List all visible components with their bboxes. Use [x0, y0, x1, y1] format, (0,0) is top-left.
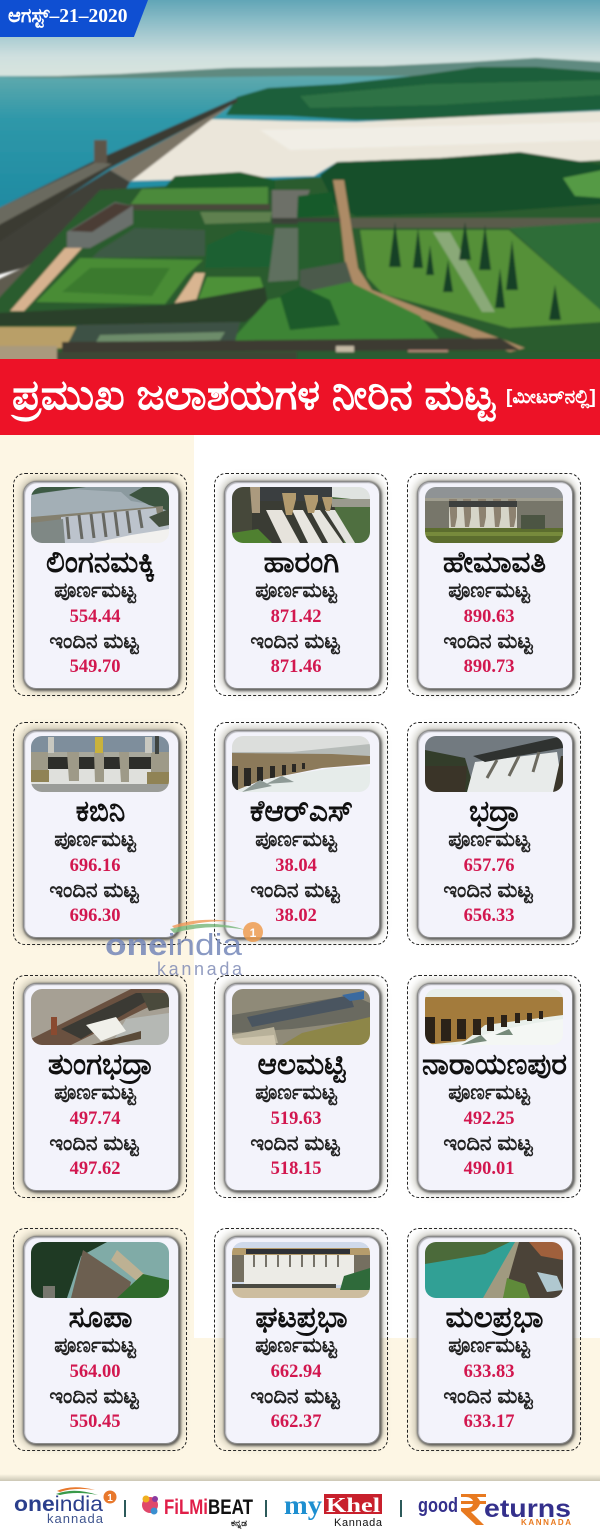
today level value: 490.01 — [464, 1159, 514, 1179]
label: today level: ಇಂದಿನ ಮಟ್ಟ — [49, 1132, 139, 1155]
logo: mykhel — [284, 1490, 383, 1529]
right garden — [360, 230, 600, 328]
mid trees — [205, 230, 278, 268]
panel: Supa — [13, 1228, 187, 1451]
label: full level: ಪೂರ್ಣಮಟ್ಟ — [255, 828, 337, 851]
foam river — [130, 111, 600, 181]
full level value: 519.63 — [271, 1109, 321, 1129]
label: full level: ಪೂರ್ಣಮಟ್ಟ — [54, 579, 136, 602]
panel: Harangi — [214, 473, 388, 696]
today level value: 549.70 — [70, 657, 120, 677]
full level value: 554.44 — [70, 607, 120, 627]
panel: Hemavathi — [407, 473, 581, 696]
watermark: oneindia kannada: 1 — [250, 926, 257, 940]
dam wall below crest — [0, 170, 130, 275]
full level value: 890.63 — [464, 607, 514, 627]
background: cream band bottom — [0, 1338, 600, 1481]
label: today level: ಇಂದಿನ ಮಟ್ಟ — [49, 879, 139, 902]
label: today level: ಇಂದಿನ ಮಟ್ಟ — [49, 630, 139, 653]
label: full level: ಪೂರ್ಣಮಟ್ಟ — [448, 828, 530, 851]
today level value: 518.15 — [271, 1159, 321, 1179]
today level value: 497.62 — [70, 1159, 120, 1179]
full level value: 662.94 — [271, 1362, 321, 1382]
today level value: 890.73 — [464, 657, 514, 677]
logo: goodreturns: KANNADA — [521, 1518, 571, 1527]
full level value: 492.25 — [464, 1109, 514, 1129]
road — [333, 180, 525, 352]
photo — [31, 487, 169, 543]
today level value: 656.33 — [464, 906, 514, 926]
label: full level: ಪೂರ್ಣಮಟ್ಟ — [54, 828, 136, 851]
label: today level: ಇಂದಿನ ಮಟ್ಟ — [250, 1385, 340, 1408]
label: full level: ಪೂರ್ಣಮಟ್ಟ — [448, 1081, 530, 1104]
logo: mykhel: Kannada — [334, 1517, 383, 1529]
photo — [232, 487, 370, 543]
background: cream panel left — [0, 435, 194, 1481]
full level value: 657.76 — [464, 856, 514, 876]
panel: Narayanapura — [407, 975, 581, 1198]
label: today level: ಇಂದಿನ ಮಟ್ಟ — [443, 1132, 533, 1155]
panel: Kabini — [13, 722, 187, 945]
label: full level: ಪೂರ್ಣಮಟ್ಟ — [255, 579, 337, 602]
today level value: 550.45 — [70, 1412, 120, 1432]
lower garden — [36, 258, 203, 304]
panel: Malaprabha — [407, 1228, 581, 1451]
green peninsula — [226, 67, 600, 120]
watermark: oneindia kannada: kannada — [157, 959, 243, 979]
label: full level: ಪೂರ್ಣಮಟ್ಟ — [448, 579, 530, 602]
label: today level: ಇಂದಿನ ಮಟ್ಟ — [250, 630, 340, 653]
panel: Ghataprabha — [214, 1228, 388, 1451]
panel: KRS — [214, 722, 388, 945]
footer: partner logos — [0, 1481, 600, 1538]
photo — [425, 487, 563, 543]
dam crest — [0, 98, 237, 243]
label: full level: ಪೂರ್ಣಮಟ್ಟ — [54, 1334, 136, 1357]
full level value: 633.83 — [464, 1362, 514, 1382]
logo: goodreturns: eturns — [484, 1495, 571, 1523]
full level value: 871.42 — [271, 607, 321, 627]
today level value: 696.30 — [70, 906, 120, 926]
logo: filmibeat — [142, 1496, 253, 1530]
logo: oneindia: oneindia — [14, 1493, 103, 1516]
name: ಆಲಮಟ್ಟಿ — [257, 1048, 346, 1081]
name: ಹೇಮಾವತಿ — [443, 546, 546, 579]
panel: Tungabhadra — [13, 975, 187, 1198]
label: today level: ಇಂದಿನ ಮಟ್ಟ — [443, 879, 533, 902]
name: ಲಿಂಗನಮಕ್ಕಿ — [46, 546, 155, 579]
name: ತುಂಗಭದ್ರಾ — [48, 1048, 153, 1081]
logo: oneindia: 1 — [107, 1493, 113, 1504]
lower-left water — [0, 327, 77, 352]
tan path left — [10, 248, 82, 311]
label: full level: ಪೂರ್ಣಮಟ್ಟ — [255, 1081, 337, 1104]
name: ನಾರಾಯಣಪುರ — [422, 1048, 567, 1081]
right tree mass — [320, 152, 600, 216]
photo — [425, 1242, 563, 1298]
trees above garden A — [165, 172, 275, 192]
sluice channel — [268, 228, 298, 282]
canal wall — [0, 287, 268, 326]
cypress trees — [389, 222, 561, 320]
photo — [31, 736, 169, 792]
full level value: 564.00 — [70, 1362, 120, 1382]
logo: goodreturns: good — [418, 1495, 458, 1517]
full level value: 497.74 — [70, 1109, 120, 1129]
full level value: 696.16 — [70, 856, 120, 876]
label: today level: ಇಂದಿನ ಮಟ್ಟ — [443, 630, 533, 653]
full level value: 38.04 — [275, 856, 317, 876]
logo: filmibeat: ಕನ್ನಡ — [231, 1518, 247, 1530]
today level value: 871.46 — [271, 657, 321, 677]
far shore — [0, 58, 600, 78]
photo — [31, 1242, 169, 1298]
footer shadow — [0, 1474, 600, 1482]
label: full level: ಪೂರ್ಣಮಟ್ಟ — [255, 1334, 337, 1357]
date ribbon — [0, 0, 148, 37]
watermark: oneindia kannada — [105, 920, 263, 979]
photo — [31, 989, 169, 1045]
logo: filmibeat: FiLMi — [164, 1496, 208, 1519]
green right of path — [195, 277, 264, 315]
logo: mykhel: Khel — [326, 1493, 380, 1517]
photo — [232, 736, 370, 792]
name: ಮಲಪ್ರಭಾ — [446, 1301, 543, 1334]
today level value: 662.37 — [271, 1412, 321, 1432]
logo: mykhel: my — [284, 1490, 323, 1520]
today level value: 38.02 — [275, 906, 317, 926]
panel: Linganamakki — [13, 473, 187, 696]
hero photo: dam and gardens — [0, 0, 600, 359]
logo: goodreturns — [418, 1494, 571, 1527]
lower land base — [0, 160, 600, 360]
label: full level: ಪೂರ್ಣಮಟ್ಟ — [448, 1334, 530, 1357]
photo — [425, 989, 563, 1045]
photo — [232, 1242, 370, 1298]
name: ಸೂಪಾ — [69, 1301, 132, 1334]
logo: oneindia — [14, 1487, 116, 1526]
photo — [232, 989, 370, 1045]
pond — [272, 190, 310, 220]
garden A — [130, 187, 268, 205]
substation — [92, 228, 205, 258]
label: today level: ಇಂದಿನ ಮಟ್ಟ — [443, 1385, 533, 1408]
label: today level: ಇಂದಿನ ಮಟ್ಟ — [49, 1385, 139, 1408]
name: ಹಾರಂಗಿ — [264, 546, 339, 579]
panel: Almatti — [214, 975, 388, 1198]
today level value: 633.17 — [464, 1412, 514, 1432]
label: today level: ಇಂದಿನ ಮಟ್ಟ — [250, 1132, 340, 1155]
tower — [94, 140, 107, 163]
label: full level: ಪೂರ್ಣಮಟ್ಟ — [54, 1081, 136, 1104]
building — [67, 202, 133, 248]
logo: oneindia: kannada — [47, 1511, 104, 1526]
tan path right — [172, 273, 205, 307]
name: ಕೆಆರ್‌ಎಸ್ — [250, 795, 353, 828]
name: ಘಟಪ್ರಭಾ — [255, 1301, 348, 1334]
date text: ಆಗಸ್ಟ್–21–2020 — [8, 6, 128, 27]
photo — [425, 736, 563, 792]
bottom garden — [230, 282, 440, 342]
name: ಕಬಿನಿ — [76, 795, 125, 828]
dam sluices — [110, 101, 237, 182]
title unit note: [ಮೀಟರ್‌ನಲ್ಲಿ] — [506, 387, 596, 408]
title band — [0, 359, 600, 435]
title: ಪ್ರಮುಖ ಜಲಾಶಯಗಳ ನೀರಿನ ಮಟ್ಟ — [12, 371, 495, 418]
name: ಭದ್ರಾ — [469, 795, 520, 828]
bridge — [62, 338, 520, 352]
panel: Bhadra — [407, 722, 581, 945]
watermark: oneindia kannada: oneindia — [105, 927, 243, 962]
label: today level: ಇಂದಿನ ಮಟ್ಟ — [250, 879, 340, 902]
